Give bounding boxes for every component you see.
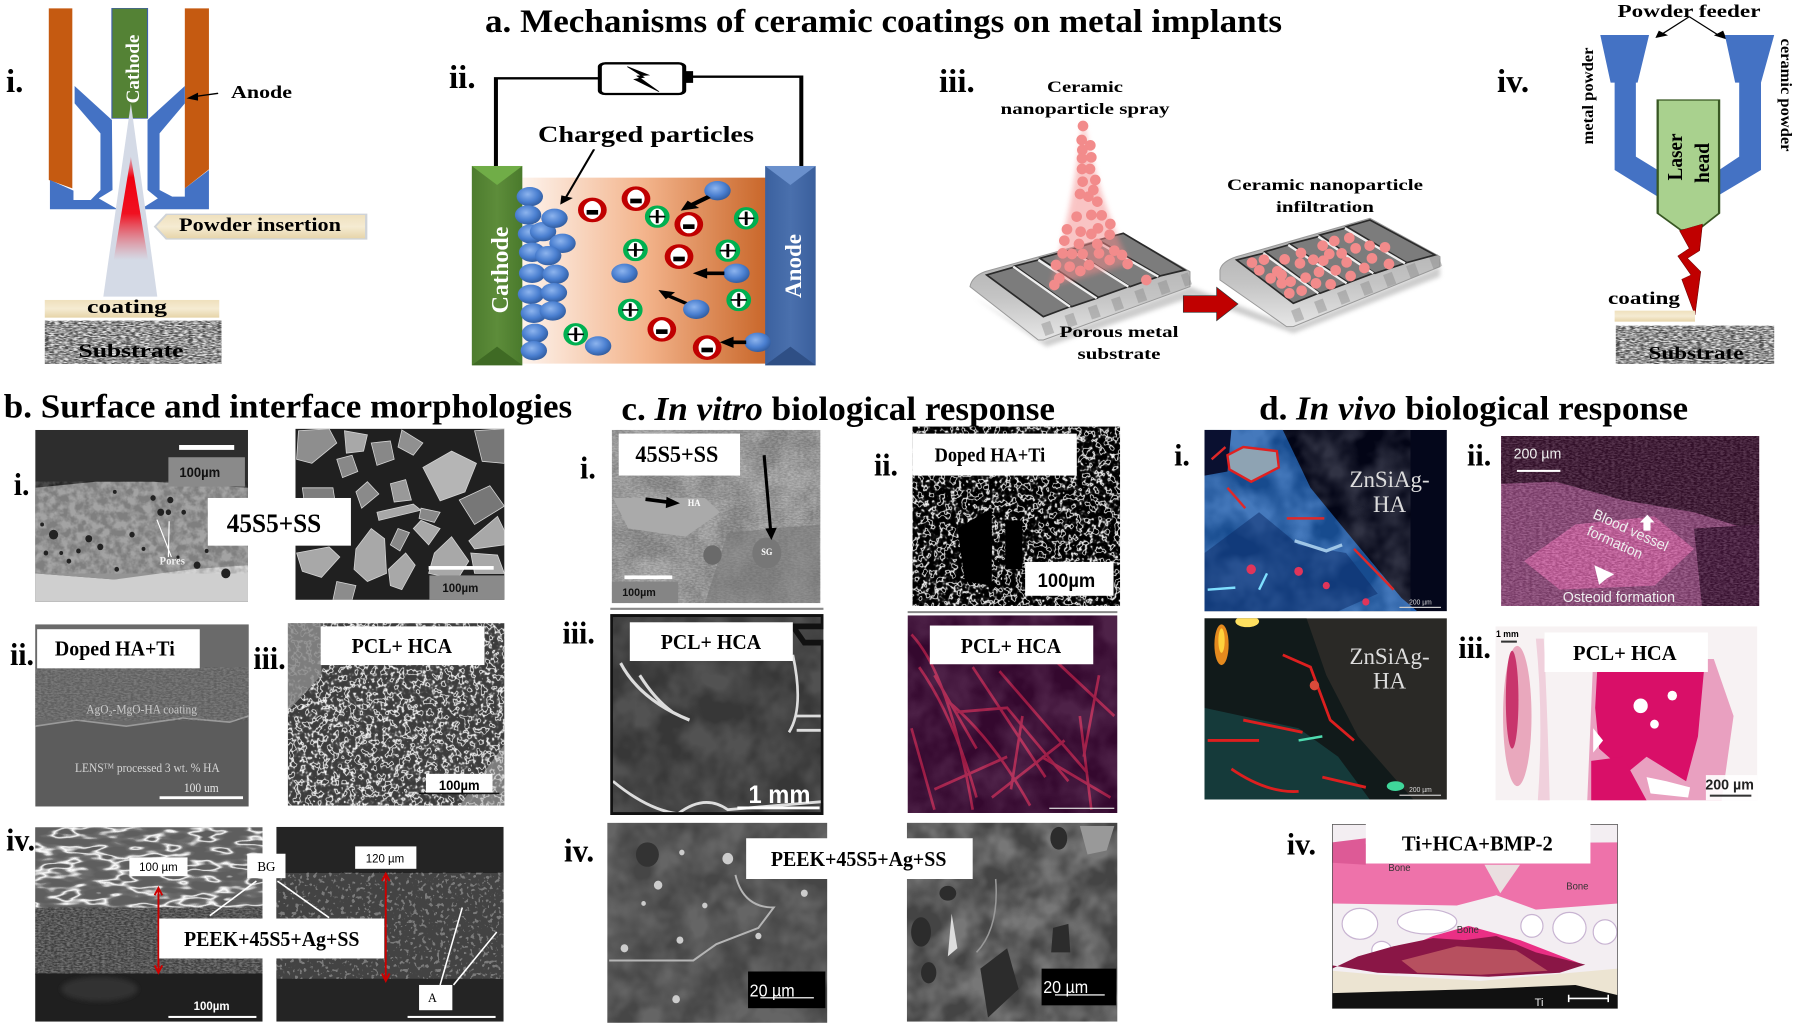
label i: i. bbox=[6, 64, 23, 100]
substrate label: Porous metal bbox=[1060, 324, 1179, 341]
positive ions bbox=[566, 207, 756, 344]
SEM: 45S5 cross section: Pores bbox=[160, 555, 186, 568]
label c-iv: iv. bbox=[564, 832, 594, 869]
porous substrate and spray artwork bbox=[970, 118, 1440, 347]
micrograph: ZnSiAg-HA top: HA bbox=[1373, 492, 1406, 518]
plasma jet bbox=[103, 103, 157, 297]
spray plume bbox=[1050, 118, 1130, 287]
micrograph: PCL HCA in vivo bbox=[1496, 626, 1757, 800]
micrograph: ZnSiAg-HA top: 200 µm bbox=[1409, 599, 1432, 606]
SEM: 45S5 surface: SG bbox=[761, 547, 773, 557]
separator lines bbox=[610, 609, 1117, 612]
SEM: PCL HCA: 100µm bbox=[439, 778, 480, 793]
micrograph: ZnSiAg-HA bottom: 200 µm bbox=[1409, 787, 1432, 794]
A annotations: A bbox=[428, 991, 438, 1005]
micrograph: Ti HCA BMP-2: Bone bbox=[1566, 881, 1588, 893]
SEM: 45S5 surface: 45S5+SS bbox=[635, 442, 718, 467]
label d-i: i. bbox=[1174, 438, 1190, 472]
SEM: particles bbox=[296, 428, 504, 600]
label: PEEK: PEEK+45S5+Ag+SS bbox=[184, 928, 359, 951]
charged particles label: Charged particles bbox=[538, 122, 754, 147]
label c-iii: iii. bbox=[562, 616, 595, 651]
SEM: particles: 100µm bbox=[442, 581, 478, 595]
label: PEEK: PEEK+45S5+Ag+SS bbox=[771, 848, 946, 871]
SEM: PCL surface: PCL+ HCA bbox=[661, 631, 761, 654]
ceramic powder label: ceramic powder bbox=[1777, 38, 1794, 152]
laser head bbox=[1658, 100, 1719, 230]
powder insertion arrow bbox=[155, 214, 366, 239]
negative ions bbox=[581, 188, 719, 358]
SEM: 45S5 surface bbox=[612, 430, 820, 604]
powder feeder label: Powder feeder bbox=[1618, 1, 1761, 21]
micrograph: ZnSiAg-HA bottom: HA bbox=[1373, 668, 1406, 694]
panel: laser cladding iv bbox=[1497, 1, 1794, 364]
SEM: PEEK left: 100µm bbox=[194, 999, 230, 1013]
SEM: 45S5 surface: HA bbox=[688, 498, 701, 508]
laser beam bbox=[1678, 224, 1702, 315]
arrow: red bbox=[1183, 287, 1238, 321]
micrograph: Ti HCA BMP-2: Bone bbox=[1388, 863, 1411, 874]
feeder arrows bbox=[1655, 17, 1727, 39]
panel: plasma spray i bbox=[6, 8, 366, 364]
substrate label: Substrate bbox=[1648, 343, 1744, 363]
spray particles bbox=[1049, 121, 1152, 290]
micrograph: blood vessel: formation bbox=[1584, 523, 1645, 563]
micrograph: fluorescence bbox=[908, 615, 1118, 813]
anode label: Anode bbox=[781, 234, 806, 298]
panel: infiltration iii bbox=[939, 64, 1440, 363]
substrate 1 bbox=[970, 233, 1190, 340]
arrow: red thickness right bbox=[382, 874, 390, 981]
SEM: PEEK left bbox=[35, 827, 262, 1022]
label c-i: i. bbox=[580, 451, 596, 486]
metal powder label: metal powder bbox=[1580, 48, 1597, 144]
arrow: red thickness left bbox=[155, 888, 162, 973]
powder insertion label: Powder insertion bbox=[179, 215, 341, 236]
micrograph: ZnSiAg-HA top bbox=[1204, 430, 1447, 612]
substrate block bbox=[1616, 326, 1774, 364]
heading b: b. Surface and interface morphologies bbox=[4, 388, 572, 426]
SEM: PCL surface bbox=[610, 614, 824, 815]
label d-ii: ii. bbox=[1467, 438, 1491, 472]
electrolyte bbox=[522, 178, 766, 364]
cathode bbox=[112, 8, 148, 118]
label b-iii: iii. bbox=[253, 641, 286, 676]
SEM: 45S5 cross section: 100µm bbox=[179, 464, 220, 480]
heading d: d. In vivo biological response bbox=[1259, 390, 1688, 427]
micrograph: blood vessel: Blood vessel bbox=[1590, 507, 1670, 555]
label: 45S5+SS bbox=[208, 498, 351, 546]
label iv: iv. bbox=[1497, 64, 1529, 100]
micrograph: fluorescence: PCL+ HCA bbox=[961, 635, 1061, 658]
anode arrow bbox=[187, 93, 218, 101]
SEM: cells right bbox=[906, 822, 1118, 1022]
micrograph: blood vessel: 200 µm bbox=[1514, 446, 1561, 463]
SEM: PEEK right bbox=[276, 826, 504, 1022]
micrograph: ZnSiAg-HA bottom bbox=[1204, 618, 1447, 800]
SEM: doped HA: LENSᵀᴹ processed 3 wt. % HA bbox=[75, 760, 220, 775]
right feeder bbox=[1719, 35, 1774, 195]
deposition cell shapes bbox=[472, 63, 816, 365]
migration arrows bbox=[658, 197, 746, 348]
anode label: Anode bbox=[231, 82, 292, 102]
SEM: PEEK left: 100 µm bbox=[139, 860, 178, 874]
substrate label: substrate bbox=[1078, 346, 1160, 363]
substrate label bbox=[1060, 324, 1179, 363]
blue particles bbox=[515, 181, 771, 360]
title: a. Mechanisms of ceramic coatings on metal implants bbox=[485, 4, 1282, 40]
label d-iv: iv. bbox=[1287, 827, 1316, 862]
SEM: 45S5 cross section bbox=[35, 430, 248, 602]
SEM: PEEK right: 120 µm bbox=[366, 851, 404, 866]
SEM: PCL HCA bbox=[288, 623, 504, 806]
label b-ii: ii. bbox=[10, 637, 34, 672]
label: 45S5+SS: 45S5+SS bbox=[227, 508, 321, 538]
micrograph: blood vessel: Osteoid formation bbox=[1563, 590, 1675, 606]
SEM: doped HA: AgO₂-MgO-HA coating bbox=[86, 702, 197, 717]
label b-iv: iv. bbox=[6, 823, 35, 858]
panel: b surface and interface morphologies bbox=[4, 388, 572, 1022]
SEM: 45S5 surface: 100µm bbox=[622, 587, 656, 599]
anode plate bbox=[765, 166, 816, 365]
circuit bbox=[496, 63, 801, 166]
label d-iii: iii. bbox=[1458, 631, 1491, 665]
micrograph: PCL HCA in vivo: 200 µm bbox=[1705, 777, 1754, 793]
label iii: iii. bbox=[939, 64, 975, 100]
SEM: cells left bbox=[607, 822, 828, 1023]
label ii: ii. bbox=[449, 60, 476, 96]
micrograph: Ti HCA BMP-2 bbox=[1332, 824, 1618, 1009]
SEM: PCL surface: 1 mm bbox=[748, 781, 810, 809]
nozzle bbox=[50, 86, 209, 209]
SEM: cells right: 20 µm bbox=[1043, 978, 1088, 997]
panel: d in vivo bbox=[1174, 390, 1759, 1009]
infiltration label bbox=[1227, 177, 1423, 216]
label: PEEK bbox=[746, 838, 973, 879]
BG annotations bbox=[210, 854, 329, 918]
substrate label: Substrate bbox=[78, 341, 184, 362]
SEM: doped HA: 100 um bbox=[184, 781, 219, 795]
micrograph: Ti HCA BMP-2: Bone bbox=[1457, 925, 1479, 936]
coating label: coating bbox=[87, 297, 168, 318]
BG annotations: BG bbox=[257, 858, 276, 874]
micrograph: Ti HCA BMP-2: Ti bbox=[1535, 997, 1543, 1009]
substrate block bbox=[44, 320, 222, 364]
charged particles arrow bbox=[560, 149, 594, 205]
cathode plate bbox=[472, 166, 522, 365]
micrograph: PCL HCA in vivo: 1 mm bbox=[1496, 629, 1519, 639]
cathode label: Cathode bbox=[488, 226, 514, 313]
left feeder bbox=[1600, 35, 1658, 197]
label b-i: i. bbox=[14, 467, 30, 502]
coating bar bbox=[1615, 311, 1695, 322]
shadow bbox=[973, 267, 1440, 347]
infiltration label: Ceramic nanoparticle bbox=[1227, 177, 1423, 194]
panel: electrophoretic deposition ii bbox=[449, 60, 816, 365]
micrograph: ZnSiAg-HA bottom: ZnSiAg- bbox=[1349, 644, 1430, 670]
coating bar bbox=[45, 300, 219, 318]
spray label: Ceramic bbox=[1047, 79, 1123, 96]
minus signs bbox=[587, 199, 713, 352]
plus signs bbox=[568, 210, 754, 341]
coating label: coating bbox=[1608, 288, 1680, 308]
plasma spray shapes bbox=[45, 8, 366, 364]
micrograph: PCL HCA in vivo: PCL+ HCA bbox=[1573, 640, 1677, 665]
micrograph: blood vessel bbox=[1501, 436, 1760, 606]
SEM: doped HA surface bbox=[912, 426, 1120, 606]
anode electrodes bbox=[49, 8, 209, 188]
label c-ii: ii. bbox=[874, 448, 898, 483]
label: PEEK bbox=[159, 919, 384, 958]
infiltrated particles bbox=[1247, 233, 1394, 299]
SEM: doped HA bbox=[35, 624, 249, 806]
SEM: doped HA surface: Doped HA+Ti bbox=[935, 445, 1045, 466]
heading c: c. In vitro biological response bbox=[621, 390, 1055, 428]
infiltration label: infiltration bbox=[1276, 199, 1374, 216]
SEM: doped HA: Doped HA+Ti bbox=[55, 638, 175, 661]
micrograph: ZnSiAg-HA top: ZnSiAg- bbox=[1349, 467, 1430, 493]
micrograph: Ti HCA BMP-2: Ti+HCA+BMP-2 bbox=[1402, 831, 1553, 856]
substrate 2 bbox=[1220, 218, 1440, 327]
SEM: doped HA surface: 100µm bbox=[1038, 571, 1095, 592]
spray label bbox=[1000, 79, 1170, 118]
SEM: PCL HCA: PCL+ HCA bbox=[352, 635, 452, 658]
laser label: Laser bbox=[1663, 134, 1687, 180]
head label: head bbox=[1690, 143, 1714, 183]
cathode label: Cathode bbox=[123, 35, 144, 103]
panel: c in vitro bbox=[562, 390, 1120, 1023]
A annotations bbox=[419, 908, 497, 1010]
spray label: nanoparticle spray bbox=[1000, 101, 1170, 118]
SEM: cells left: 20 µm bbox=[750, 981, 795, 1000]
laser cladding shapes bbox=[1600, 17, 1774, 364]
